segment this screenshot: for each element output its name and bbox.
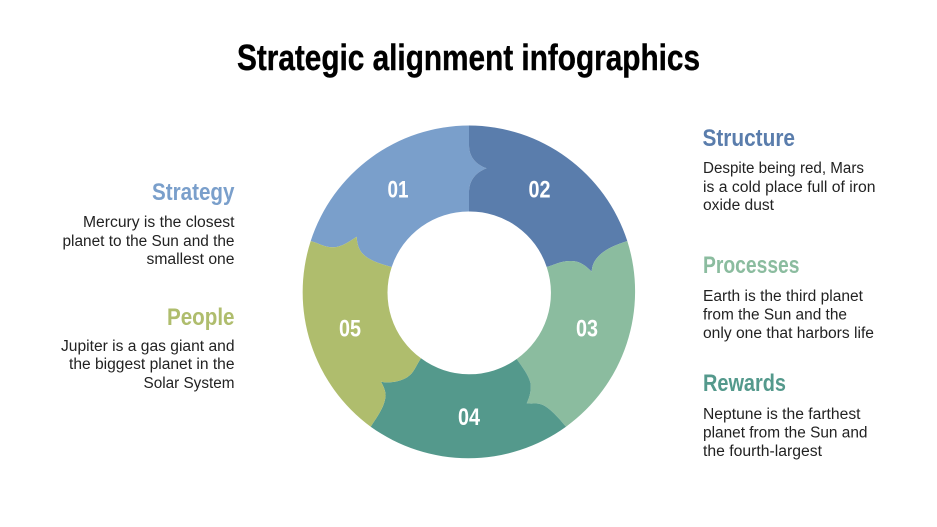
text block: Strategy: Strategy bbox=[152, 179, 235, 206]
text block: Structure: Structure bbox=[702, 125, 795, 152]
text block: People: Jupiter is a gas giant and bbox=[61, 338, 234, 355]
number 02: 02 bbox=[528, 176, 550, 204]
text block: Processes bbox=[703, 252, 874, 342]
text block: People: People bbox=[167, 304, 234, 331]
text block: Rewards: Rewards bbox=[703, 370, 786, 397]
title: Strategic alignment infographics bbox=[237, 37, 700, 78]
text block: Rewards: planet from the Sun and bbox=[703, 424, 868, 442]
text block: Processes: Processes bbox=[703, 252, 800, 279]
donut chart bbox=[303, 126, 635, 458]
number 05: 05 bbox=[339, 316, 361, 342]
text block: Structure: Despite being red, Mars bbox=[703, 160, 864, 177]
text block: Rewards: the fourth-largest bbox=[703, 443, 823, 460]
number 03: 03 bbox=[576, 316, 598, 342]
text block: Structure: oxide dust bbox=[703, 197, 775, 214]
text block: People: Solar System bbox=[144, 375, 234, 392]
number 04: 04 bbox=[458, 404, 480, 431]
text block: Strategy: planet to the Sun and the bbox=[62, 233, 234, 250]
text block: Processes: Earth is the third planet bbox=[703, 288, 864, 305]
text block: People: the biggest planet in the bbox=[69, 356, 234, 373]
number 01: 01 bbox=[388, 176, 408, 204]
text block: Strategy: smallest one bbox=[146, 251, 234, 268]
segment 04 bbox=[371, 358, 566, 458]
text block: Processes: from the Sun and the bbox=[703, 306, 847, 324]
text block: Rewards: Neptune is the farthest bbox=[703, 406, 861, 423]
text block: Strategy bbox=[62, 179, 235, 268]
segment 01 bbox=[311, 126, 487, 267]
text block: Structure: is a cold place full of iron bbox=[703, 179, 876, 196]
text block: Rewards bbox=[703, 370, 868, 460]
text block: Processes: only one that harbors life bbox=[703, 325, 874, 342]
segment 02 bbox=[469, 126, 627, 272]
text block: People bbox=[61, 304, 234, 392]
segment 03 bbox=[517, 241, 635, 427]
text block: Structure bbox=[702, 125, 876, 214]
text block: Strategy: Mercury is the closest bbox=[83, 214, 235, 231]
segment 05 bbox=[303, 237, 421, 427]
